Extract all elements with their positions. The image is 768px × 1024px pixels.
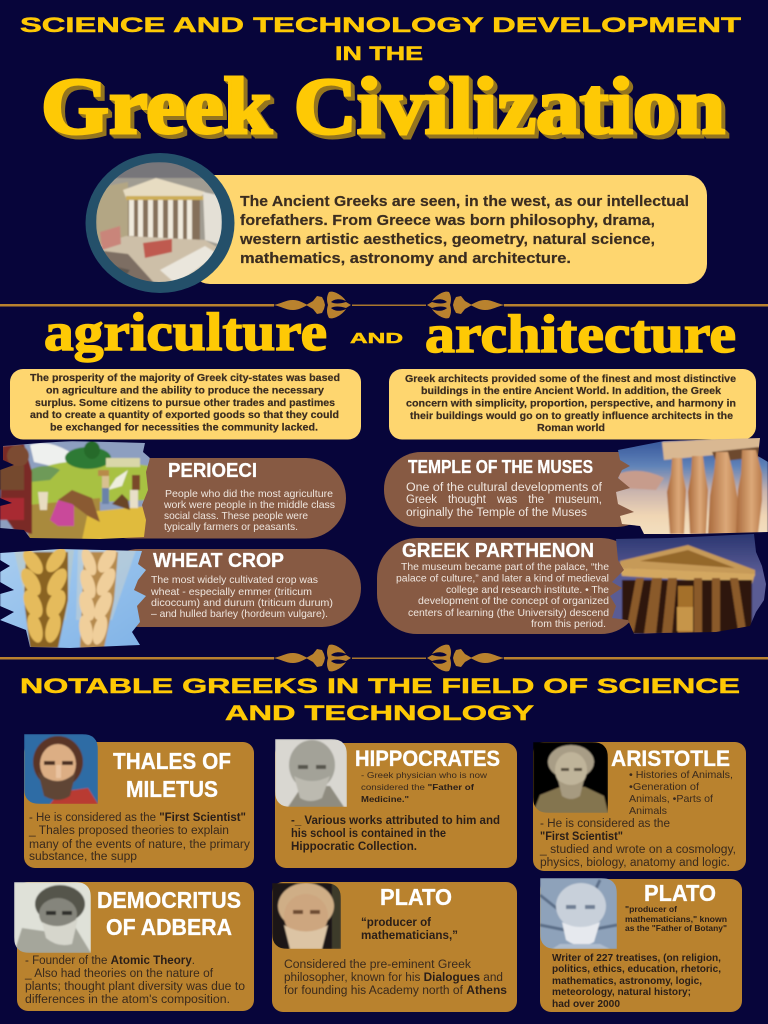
card: thales of miletus — [24, 734, 254, 868]
plato bust quote: as the "Father of Botany" — [625, 923, 727, 933]
heading: notable greeks — [20, 675, 740, 725]
intro text: forefathers. From Greece was born philosophy, drama, — [240, 212, 655, 229]
plato bust name: PLATO — [644, 880, 716, 906]
main title: Greek Civilization: Greek Civilization — [41, 63, 725, 151]
plato bust text: politics, ethics, education, rhetoric, — [552, 963, 721, 975]
plato bust text: Writer of 227 treatises, (on religion, — [552, 952, 721, 964]
divider: bottom ornament — [0, 645, 768, 671]
parthenon text — [396, 561, 609, 630]
portrait: democritus — [14, 882, 91, 953]
hippocrates subtitle — [361, 770, 488, 804]
democritus name: DEMOCRITUS — [97, 887, 241, 913]
portrait: aristotle — [533, 742, 608, 813]
wheat crop text: dicoccum) and durum (triticum durum) — [151, 597, 333, 609]
portrait: hippocrates — [275, 739, 347, 807]
parthenon text: college and research institute. • The — [446, 584, 609, 596]
title: science and technology development: SCIENCE AND TECHNOLOGY DEVELOPMENT — [20, 14, 741, 37]
panel: perioeci — [0, 441, 346, 541]
plato bust text: mathematics, astronomy, logic, — [552, 975, 702, 987]
aristotle works — [629, 769, 733, 817]
hippocrates text — [291, 815, 500, 853]
hippocrates subtitle: Medicine." — [361, 794, 409, 804]
aristotle works: • Histories of Animals, — [629, 769, 733, 781]
temple text: One of the cultural developments of — [406, 482, 603, 494]
panel: greek parthenon — [377, 532, 768, 636]
perioeci text: People who did the most agriculture — [165, 488, 333, 500]
panel: agriculture summary: and to create a quantity of exported goods so that they could — [30, 409, 339, 421]
parthenon text: from this period. — [531, 618, 606, 630]
image: caryatids — [612, 436, 768, 536]
temple text: Greek thought was the museum, — [406, 494, 602, 506]
panel: architecture summary — [389, 369, 756, 440]
thales text — [28, 812, 250, 863]
parthenon text: centers of learning (the University) descend — [408, 607, 609, 619]
aristotle text: _ studied and wrote on a cosmology, — [539, 844, 736, 856]
plato bust text: had over 2000 — [552, 998, 620, 1010]
democritus name — [97, 887, 241, 940]
plato bust quote: "producer of — [625, 904, 677, 914]
thales text: - He is considered as the "First Scientist" — [29, 812, 246, 824]
portrait: plato bust — [540, 878, 617, 949]
thales text: _ Thales proposed theories to explain — [28, 825, 229, 837]
image: wheat ears — [0, 544, 150, 650]
democritus name: OF ADBERA — [106, 914, 232, 940]
aristotle text — [539, 818, 736, 869]
democritus text: differences in the atom's composition. — [25, 994, 230, 1006]
aristotle works: Animals, •Parts of — [629, 793, 713, 805]
portrait: plato — [272, 883, 341, 949]
panel: wheat crop — [0, 544, 361, 650]
panel: architecture summary: Roman world — [537, 422, 605, 434]
card: hippocrates — [275, 739, 517, 868]
temple text: originally the Temple of the Muses — [406, 507, 587, 519]
thales text: substance, the supp — [29, 851, 137, 863]
card: plato — [272, 882, 517, 1012]
plato text: Considered the pre-eminent Greek — [284, 959, 471, 971]
hippocrates text: his school is contained in the — [291, 828, 446, 840]
perioeci text: work were people in the middle class — [163, 499, 335, 511]
divider: top ornament — [0, 292, 768, 318]
title: science and technology development — [20, 14, 741, 65]
aristotle text: - He is considered as the — [540, 818, 670, 830]
thales name: THALES OF — [113, 748, 231, 774]
plato bust quote — [625, 904, 727, 933]
perioeci text — [163, 488, 335, 533]
portrait: thales — [24, 734, 98, 804]
plato quote: “producer of — [361, 917, 431, 929]
panel: agriculture summary — [10, 369, 361, 440]
perioeci text: typically farmers or peasants. — [164, 521, 298, 533]
parthenon text: development of the concept of organized — [418, 595, 609, 607]
panel: agriculture summary: be exchanged for necessities the community lacked. — [50, 422, 318, 434]
democritus text — [24, 955, 245, 1006]
hippocrates name: HIPPOCRATES — [355, 746, 500, 771]
aristotle text: physics, biology, anatomy and logic. — [540, 857, 730, 869]
heading: and: AND — [350, 331, 403, 347]
panel: architecture summary: their buildings would go on to greatly influence architects in the — [410, 410, 733, 422]
hippocrates subtitle: considered the "Father of — [361, 782, 474, 792]
panel: agriculture summary: surplus. Some citizens to pursue other trades and pastimes — [35, 397, 335, 409]
democritus text: plants; thought plant diversity was due to — [25, 981, 245, 993]
icon: temple medallion — [86, 153, 234, 293]
plato text — [284, 959, 507, 997]
perioeci title: PERIOECI — [168, 460, 257, 482]
aristotle works: Animals — [629, 805, 667, 817]
plato text: philosopher, known for his Dialogues and — [284, 972, 503, 984]
plato quote — [361, 917, 458, 942]
image: farmers harvesting — [0, 441, 150, 541]
image: parthenon — [608, 532, 768, 636]
panel: temple of the muses — [384, 436, 768, 536]
parthenon title: GREEK PARTHENON — [402, 540, 594, 562]
thales text: many of the events of nature, the primary — [29, 839, 250, 851]
panel: introduction — [86, 153, 707, 293]
heading: agriculture: agriculture — [44, 302, 327, 362]
plato bust text — [552, 952, 721, 1010]
aristotle name: ARISTOTLE — [611, 746, 730, 771]
thales name — [113, 748, 231, 802]
wheat crop text: wheat - especially emmer (triticum — [150, 586, 312, 598]
card: aristotle — [533, 742, 746, 871]
panel: architecture summary: buildings in the entire Ancient World. In addition, the Greek — [421, 385, 721, 397]
democritus text: - Founder of the Atomic Theory. — [25, 955, 195, 967]
thales name: MILETUS — [126, 776, 218, 802]
aristotle text: "First Scientist" — [540, 831, 623, 843]
wheat crop text — [150, 574, 333, 620]
panel: agriculture summary: on agriculture and the ability to produce the necessary — [46, 384, 324, 396]
title: science and technology development: IN THE — [335, 43, 423, 65]
aristotle works: •Generation of — [629, 781, 699, 793]
democritus text: _ Also had theories on the nature of — [24, 968, 214, 980]
card: plato (father of botany) — [540, 878, 742, 1012]
plato name: PLATO — [380, 884, 452, 910]
parthenon text: The museum became part of the palace, “the — [401, 561, 609, 573]
heading: notable greeks: NOTABLE GREEKS IN THE FIELD OF SCIENCE — [20, 675, 740, 698]
panel: architecture summary: Greek architects provided some of the finest and most distinctive — [405, 373, 736, 385]
hippocrates text: -_ Various works attributed to him and — [291, 815, 500, 827]
intro text: western artistic aesthetics, geometry, natural science, — [239, 231, 655, 248]
parthenon text: palace of culture,” and later a kind of medieval — [396, 572, 609, 584]
plato bust quote: mathematicians," known — [625, 914, 727, 924]
perioeci text: social class. These people were — [164, 510, 308, 522]
temple text — [406, 482, 603, 519]
hippocrates text: Hippocratic Collection. — [291, 841, 417, 853]
panel: agriculture summary: The prosperity of the majority of Greek city-states was based — [30, 372, 340, 384]
temple title: TEMPLE OF THE MUSES — [408, 457, 593, 477]
wheat crop title: WHEAT CROP — [153, 550, 284, 572]
panel: architecture summary: concern with simplicity, proportion, perspective, and harmony in — [406, 398, 736, 410]
intro text — [239, 193, 689, 267]
plato quote: mathematicians,” — [361, 930, 458, 942]
hippocrates subtitle: - Greek physician who is now — [361, 770, 488, 780]
wheat crop text: – and hulled barley (hordeum vulgare). — [151, 608, 328, 620]
plato text: for founding his Academy north of Athens — [284, 985, 507, 997]
wheat crop text: The most widely cultivated crop was — [151, 574, 318, 586]
intro text: The Ancient Greeks are seen, in the west, as our intellectual — [240, 193, 689, 210]
heading: architecture: architecture — [425, 304, 736, 364]
heading: notable greeks: AND TECHNOLOGY — [225, 702, 534, 725]
card: democritus of adbera — [14, 882, 254, 1011]
intro text: mathematics, astronomy and architecture. — [240, 250, 571, 267]
plato bust text: meteorology, natural history; — [552, 986, 691, 998]
